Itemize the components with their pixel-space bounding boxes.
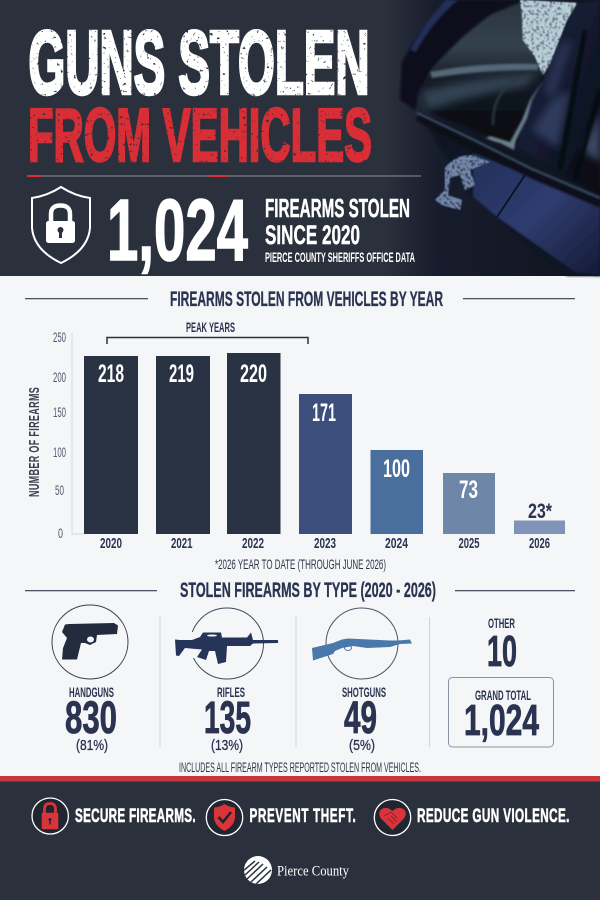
icon: shield with padlock — [32, 187, 90, 263]
footer panel — [0, 776, 600, 900]
bar 2024: 100 — [383, 455, 410, 483]
bar 2020: 218 — [98, 360, 124, 388]
stat: shotguns: 49 — [344, 692, 377, 743]
header divider — [27, 175, 421, 177]
stat caption: FIREARMS STOLEN — [265, 193, 410, 223]
bar 2024 — [370, 450, 423, 552]
stat: rifles — [204, 684, 251, 754]
icon: secure padlock — [32, 798, 68, 834]
y axis: 50 — [55, 482, 64, 498]
bar 2024: 2024 — [385, 536, 408, 552]
bar 2021: 219 — [169, 360, 194, 388]
bar 2023 — [299, 394, 352, 552]
stat: other: 10 — [487, 627, 517, 676]
heading: by type: STOLEN FIREARMS BY TYPE (2020 - 2026) — [180, 579, 436, 602]
grand total box: 1,024 — [464, 696, 539, 745]
peak years bracket — [107, 319, 308, 344]
bar 2020 — [84, 356, 138, 552]
bar 2026 — [514, 500, 565, 552]
icon: shotgun — [312, 608, 412, 679]
bar 2023: 171 — [312, 399, 336, 427]
y axis: 0 — [58, 525, 63, 541]
y axis: 150 — [53, 404, 66, 420]
slogan: reduce gun violence: REDUCE GUN VIOLENCE. — [417, 805, 569, 827]
stat: shotguns: (5%) — [349, 737, 375, 754]
stat: handguns — [65, 684, 117, 754]
stat caption: PIERCE COUNTY SHERIFFS OFFICE DATA — [265, 249, 415, 265]
y axis: 250 — [53, 329, 66, 345]
stat: rifles: (13%) — [211, 737, 243, 754]
chart footnote: *2026 YEAR TO DATE (THROUGH JUNE 2026) — [215, 556, 386, 572]
stat: rifles: RIFLES — [217, 684, 245, 700]
y axis: 200 — [53, 369, 66, 385]
icon: handgun — [52, 605, 128, 679]
panel: firearm types — [25, 579, 575, 775]
stat: shotguns — [342, 684, 386, 754]
photo: car with broken window — [385, 0, 600, 276]
bar 2022 — [227, 353, 280, 552]
bar 2022: 2022 — [242, 536, 264, 552]
big number: 1,024 — [107, 182, 248, 279]
stat: other — [487, 615, 517, 676]
slogan: prevent theft: PREVENT THEFT. — [250, 805, 356, 827]
grand total box — [448, 678, 554, 747]
stat: other: OTHER — [488, 615, 515, 631]
red band — [0, 776, 600, 782]
stat: rifles: 135 — [204, 692, 251, 743]
bar 2025: 2025 — [458, 536, 480, 552]
icon: heart handshake — [374, 800, 411, 836]
stat: shotguns: SHOTGUNS — [342, 684, 386, 700]
footer background — [0, 781, 600, 900]
slogan: secure firearms: SECURE FIREARMS. — [75, 805, 196, 827]
bar 2022: 220 — [240, 360, 267, 388]
bar 2025: 73 — [459, 476, 478, 504]
logo: pierce county — [243, 856, 349, 885]
icon: shield check — [206, 800, 243, 836]
header panel — [0, 0, 600, 279]
bar 2020: 2020 — [100, 536, 122, 552]
stat caption: SINCE 2020 — [265, 220, 360, 250]
bar 2026: 23* — [528, 500, 553, 523]
column dividers — [160, 617, 430, 747]
y axis title: NUMBER OF FIREARMS — [26, 387, 43, 497]
bar 2026: 2026 — [529, 536, 550, 552]
stat caption — [265, 193, 415, 265]
stat: handguns: HANDGUNS — [69, 684, 114, 700]
logo: pierce county: Pierce County — [277, 864, 349, 880]
panel: bar chart section — [25, 288, 575, 572]
bar 2021: 2021 — [171, 536, 192, 552]
y axis — [53, 329, 84, 541]
y axis: 100 — [53, 444, 66, 460]
icon: rifle — [175, 608, 278, 679]
bar 2023: 2023 — [314, 536, 336, 552]
grand total box: GRAND TOTAL — [475, 687, 531, 703]
stat: handguns: 830 — [65, 692, 117, 743]
stat: handguns: (81%) — [76, 737, 108, 754]
header background — [0, 0, 600, 276]
bar 2025 — [443, 473, 495, 552]
peak years bracket: PEAK YEARS — [186, 319, 235, 335]
bar 2021 — [156, 356, 210, 552]
